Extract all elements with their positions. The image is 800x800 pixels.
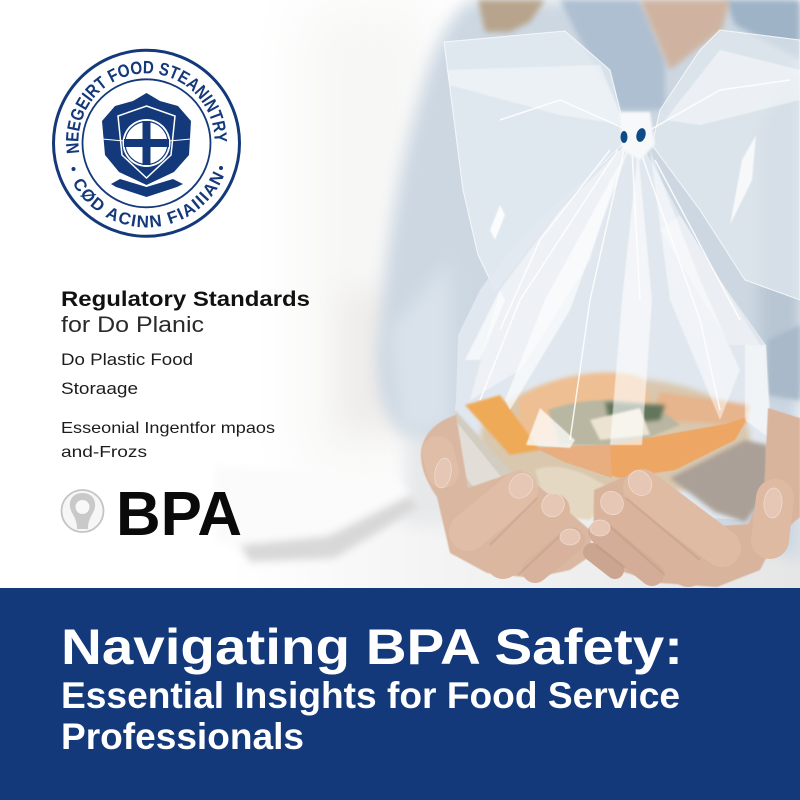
heading: Regulatory Standards [61, 288, 310, 311]
title line 1: Navigating BPA Safety: [61, 619, 683, 675]
body line 1: Do Plastic Food [61, 350, 193, 369]
blurred person [377, 0, 800, 560]
bag sheen and folds [447, 50, 800, 500]
seal top text: NEEGEIRT FOOD STEANINTRY [66, 60, 228, 154]
bag upper-right ear [652, 30, 800, 300]
blurred notebook [215, 465, 418, 562]
body line 2: Storaage [61, 379, 138, 398]
left hand [421, 415, 592, 578]
right hand [593, 408, 800, 587]
bag fold lines [480, 80, 790, 440]
title line 3: Professionals [61, 716, 304, 757]
bag upper-left ear [444, 31, 625, 290]
finger shadows [490, 498, 700, 575]
left text block [61, 288, 310, 461]
body line 4: and-Frozs [61, 444, 147, 461]
subheading: for Do Planic [61, 312, 204, 337]
title line 2: Essential Insights for Food Service [61, 675, 680, 716]
seal bottom text: CØD ACINN FIAIIIAN [74, 171, 224, 228]
fingernails [433, 457, 783, 545]
body line 3: Esseonial Ingentfor mpaos [61, 420, 275, 437]
BPA label: BPA [116, 480, 242, 549]
food in bag [450, 373, 770, 522]
fingers [438, 452, 775, 574]
title banner [0, 588, 800, 800]
bag knot [620, 112, 655, 160]
hands [421, 408, 800, 587]
bag body [448, 145, 770, 520]
photo background [0, 0, 800, 590]
seal logo [52, 48, 241, 238]
icon: shield with cross [102, 93, 191, 197]
seal disc [54, 50, 240, 236]
seal dots [72, 166, 223, 171]
plastic bag [444, 30, 800, 522]
icon: light bulb badge [62, 490, 104, 532]
